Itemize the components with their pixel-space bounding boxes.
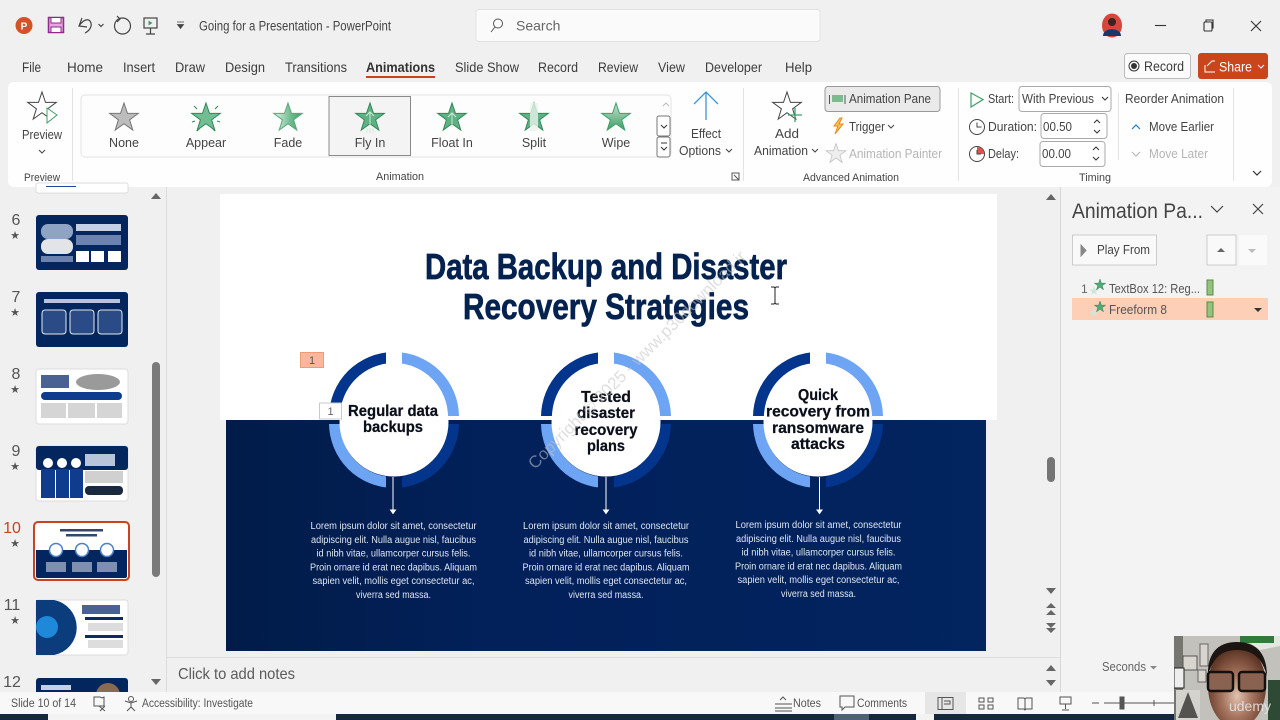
- ribbon tabs: Help: [785, 59, 812, 75]
- zoom slider: [1092, 697, 1174, 709]
- effect: None: [109, 103, 139, 150]
- thumbnail 8: [10, 366, 128, 424]
- body text 3: Proin ornare id erat nec dapibus. Aliquam: [735, 562, 902, 572]
- timing: delay: [970, 142, 1105, 166]
- ribbon tabs: Draw: [175, 59, 206, 75]
- animation item 1: 1: [1081, 282, 1088, 296]
- body text 1: viverra sed massa.: [356, 590, 431, 601]
- seconds control: Seconds: [1102, 660, 1146, 674]
- preview group: Preview: [22, 128, 63, 142]
- column 1: Regular data backups: [310, 352, 477, 601]
- ribbon tabs: Home: [67, 59, 103, 75]
- ribbon tabs: Design: [225, 59, 265, 75]
- thumbnail 12: 12: [3, 674, 21, 691]
- timing: delay: 00.00: [1042, 147, 1071, 161]
- animation tag: orange 1: 1: [309, 355, 315, 367]
- heading 2: [574, 389, 638, 455]
- dialog launcher: [732, 173, 739, 180]
- ribbon tabs: Developer: [705, 59, 762, 75]
- heading 3: ransomware: [772, 420, 864, 437]
- arrow 1: [390, 477, 396, 514]
- icon: spell check: [94, 697, 105, 711]
- add animation: Add: [775, 127, 799, 141]
- title bar: [16, 10, 1261, 42]
- body text 3: viverra sed massa.: [781, 589, 856, 600]
- slide title: [425, 246, 787, 327]
- slide thumbnails panel: [3, 183, 166, 718]
- accessibility status: [125, 696, 253, 711]
- slide canvas: [220, 194, 997, 651]
- body text 2: Proin ornare id erat nec dapibus. Aliquam: [522, 562, 690, 574]
- search box: Search: [516, 18, 560, 34]
- thumbnail 10 (selected): 10: [3, 520, 21, 537]
- thumbnail 6: [10, 212, 128, 270]
- effect options: Options: [679, 144, 721, 158]
- webcam presenter video: udemy: [1229, 698, 1271, 714]
- preview group: [22, 92, 63, 184]
- effect: Wipe: Wipe: [602, 136, 630, 150]
- animation item 2 selected: Freeform 8: [1109, 303, 1167, 317]
- taskbar strip: [0, 714, 1280, 720]
- column 2: Tested disaster recovery plans: [522, 352, 690, 601]
- timing: delay: Delay:: [988, 147, 1019, 161]
- body text 2: viverra sed massa.: [568, 590, 644, 601]
- document title: Going for a Presentation - PowerPoint: [199, 18, 391, 34]
- reorder animation: Reorder Animation: [1125, 92, 1224, 106]
- thumbnail 12: [4, 676, 128, 692]
- body text 3: Lorem ipsum dolor sit amet, consectetur: [736, 520, 902, 531]
- effect: Fly In: [355, 103, 385, 150]
- heading 3: [766, 387, 870, 453]
- timing: duration: Duration:: [988, 120, 1037, 134]
- column 3: Quick recovery from ransomware attacks: [735, 352, 902, 600]
- heading 1: backups: [363, 419, 423, 436]
- body text 2: [522, 521, 690, 601]
- ribbon tabs: Review: [598, 59, 639, 75]
- ribbon panel: Animation: [376, 171, 424, 183]
- effect: Fly In: Fly In: [355, 136, 385, 150]
- body text 1: Proin ornare id erat nec dapibus. Aliquam: [310, 562, 477, 574]
- slide vertical scrollbar: [1046, 187, 1060, 692]
- record button: Record: [1144, 58, 1184, 74]
- heading 3: attacks: [791, 436, 845, 453]
- ribbon panel: [8, 82, 1272, 187]
- comments button: [840, 696, 907, 710]
- timing: start: Start:: [988, 92, 1014, 106]
- share button: [1198, 53, 1268, 79]
- ribbon tabs: View: [658, 59, 686, 75]
- body text 3: adipiscing elit. Nulla augue nisl, faucibus: [736, 534, 901, 545]
- share button: Share: [1219, 58, 1252, 74]
- ribbon panel: Advanced Animation: [803, 172, 899, 184]
- animation painter: Animation Painter: [849, 147, 942, 161]
- icon: save: [48, 18, 64, 32]
- heading 2: Tested: [581, 389, 631, 406]
- effect: Wipe: [602, 103, 630, 150]
- thumbnail 7: [10, 289, 128, 347]
- animation tag: white 1: 1: [327, 406, 334, 418]
- thumbnail 11: 11: [4, 597, 20, 614]
- thumbnail 7: ★: [10, 307, 20, 319]
- notes area: [167, 658, 1060, 686]
- effect: Fade: [274, 103, 302, 150]
- effect options: Effect: [691, 127, 721, 141]
- heading 2: recovery: [574, 422, 638, 439]
- icon: redo: [114, 16, 130, 34]
- ring graphic 2: [541, 352, 671, 488]
- body text 1: [310, 521, 477, 601]
- thumbnail 10 (selected): [3, 520, 129, 580]
- timing: duration: 00.50: [1043, 120, 1072, 134]
- ring graphic 3: [753, 352, 883, 488]
- presenter face: [1208, 644, 1266, 720]
- animation pane button: Animation Pane: [849, 92, 931, 106]
- thumbnail 7: 7: [12, 289, 21, 306]
- arrow 2: [604, 477, 608, 514]
- icon: text cursor: [771, 287, 779, 304]
- body text 1: Lorem ipsum dolor sit amet, consectetur: [310, 521, 477, 532]
- body text 2: adipiscing elit. Nulla augue nisl, faucibus: [524, 535, 688, 546]
- effect: Float In: Float In: [431, 136, 473, 150]
- slide title: Recovery Strategies: [463, 286, 749, 327]
- animation item 1: [1081, 279, 1213, 296]
- status bar: Slide 10 of 14: [11, 698, 77, 710]
- heading 1: Regular data: [348, 403, 438, 420]
- animation item 1: TextBox 12: Reg...: [1109, 282, 1200, 296]
- thumbnail 8: 8: [12, 366, 21, 383]
- notes button: [775, 697, 821, 711]
- animation painter: [826, 144, 942, 162]
- effect: Appear: Appear: [186, 136, 226, 150]
- watermark: Copyright © 2025 - www.p30download.ir: [524, 247, 750, 473]
- thumbnail 10 (selected): ★: [10, 538, 20, 550]
- effect: Float In: [431, 103, 473, 150]
- thumbnail 11: [4, 597, 128, 655]
- body text 1: sapien velit, mollis eget consectetur ac,: [312, 576, 474, 587]
- thumbnail 6: ★: [10, 230, 20, 242]
- add animation: Animation: [754, 144, 808, 158]
- gallery scroll controls: [657, 103, 670, 157]
- reorder animation: [1125, 92, 1224, 161]
- effect: Appear: [186, 103, 226, 150]
- ribbon tabs: Record: [538, 59, 578, 75]
- reorder animation: Move Earlier: [1149, 120, 1214, 134]
- effect: Split: [520, 103, 548, 150]
- search box: [476, 10, 820, 42]
- icon: undo: [79, 18, 104, 33]
- add animation: [754, 92, 818, 158]
- play from button: [1072, 235, 1156, 265]
- timing: start: [971, 86, 1111, 112]
- user avatar: [1102, 14, 1122, 38]
- arrow 3: [817, 477, 822, 514]
- effect options: [679, 92, 732, 158]
- trigger: [834, 118, 894, 134]
- record button: [1124, 54, 1190, 78]
- ribbon tabs: [22, 59, 812, 78]
- body text 1: adipiscing elit. Nulla augue nisl, faucibus: [311, 535, 476, 546]
- ring graphic 1: [329, 352, 459, 488]
- body text 3: [735, 520, 902, 600]
- status bar: [0, 692, 1280, 714]
- animation pane button: [825, 86, 940, 112]
- thumbnail 9: 9: [12, 443, 21, 460]
- heading 2: plans: [587, 438, 625, 455]
- thumbnail 8: ★: [10, 384, 20, 396]
- ribbon tabs: Slide Show: [455, 59, 520, 75]
- ribbon tabs: File: [22, 59, 41, 75]
- icon: customize toolbar: [177, 22, 184, 28]
- effect: Fade: Fade: [274, 136, 302, 150]
- ribbon panel: Timing: [1079, 172, 1111, 184]
- ribbon tabs: Animations: [366, 59, 435, 75]
- reorder animation: Move Later: [1149, 147, 1208, 161]
- comments button: Comments: [857, 698, 907, 710]
- slide lower navy band: [226, 420, 986, 651]
- animation item 2 selected: [1072, 298, 1268, 320]
- body text 2: sapien velit, mollis eget consectetur ac,: [525, 576, 687, 587]
- reorder buttons: [1207, 235, 1267, 265]
- notes area: Click to add notes: [178, 666, 295, 683]
- thumbnail scrollbar: [151, 193, 161, 685]
- body text 1: id nibh vitae, ullamcorper cursus felis.: [316, 548, 470, 560]
- icon: start presentation: [144, 18, 157, 34]
- webcam presenter video: [1174, 636, 1280, 720]
- accessibility status: Accessibility: Investigate: [142, 698, 253, 710]
- collapse ribbon: [1253, 171, 1261, 175]
- window controls: [1155, 20, 1261, 31]
- body text 2: Lorem ipsum dolor sit amet, consectetur: [523, 521, 690, 532]
- heading 3: Quick: [798, 387, 838, 404]
- slide upper white area: [220, 194, 997, 420]
- timing: duration: [970, 114, 1107, 138]
- icon: PowerPoint logo: P: [21, 22, 28, 32]
- icon: PowerPoint logo: [16, 17, 32, 34]
- body text 2: id nibh vitae, ullamcorper cursus felis.: [529, 548, 683, 560]
- effect: None: None: [109, 136, 139, 150]
- ribbon tabs: Transitions: [285, 59, 347, 75]
- animation tag: white 1: [320, 403, 342, 419]
- heading 2: disaster: [577, 405, 635, 422]
- play from button: Play From: [1097, 243, 1150, 257]
- animation tag: orange 1: [300, 352, 324, 368]
- body text 3: sapien velit, mollis eget consectetur ac,: [738, 575, 900, 586]
- heading 1: [348, 403, 438, 436]
- notes button: Notes: [793, 698, 821, 710]
- heading 3: recovery from: [766, 404, 870, 420]
- animation pane: [1061, 187, 1280, 692]
- thumbnail 9: ★: [10, 461, 20, 473]
- pane title: Animation Pa...: [1072, 200, 1203, 223]
- preview group: Preview: [24, 172, 60, 184]
- trigger: Trigger: [849, 120, 885, 134]
- animation gallery: [81, 95, 671, 157]
- body text 3: id nibh vitae, ullamcorper cursus felis.: [742, 548, 896, 558]
- thumbnail 11: ★: [10, 615, 20, 627]
- slide title: Data Backup and Disaster: [425, 246, 787, 287]
- effect: Split: Split: [522, 136, 547, 150]
- timing: start: With Previous: [1022, 92, 1094, 106]
- ribbon tabs: Insert: [123, 59, 155, 75]
- view buttons: [925, 692, 1071, 714]
- thumbnail 9: [10, 443, 128, 501]
- thumbnail 6: 6: [12, 212, 21, 229]
